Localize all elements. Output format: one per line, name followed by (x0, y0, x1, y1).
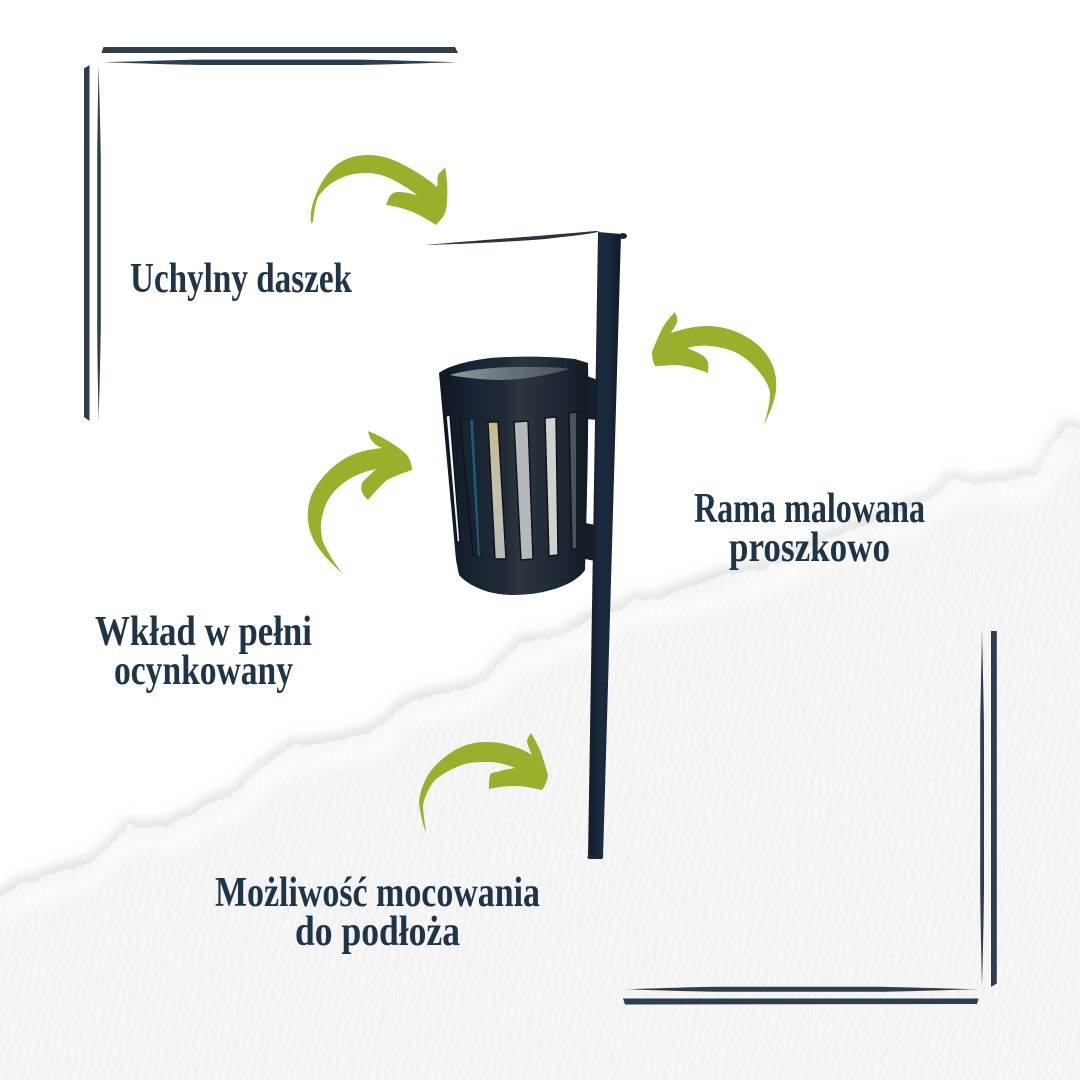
label: frame: Rama malowana (694, 486, 925, 532)
label: ground fixing: do podłoża (295, 909, 460, 955)
arrow: to roof (311, 155, 447, 225)
arrow: to ground fixing (419, 733, 548, 833)
label: frame: proszkowo (729, 525, 890, 571)
wall brackets (585, 376, 598, 561)
pole (588, 232, 627, 859)
label: ground fixing: Możliwość mocowania (215, 870, 540, 916)
bin slots (446, 412, 577, 560)
label: roof: Uchylny daszek (130, 256, 353, 302)
label: ground fixing (215, 870, 540, 955)
label: frame (694, 486, 925, 571)
bin body (439, 357, 588, 595)
icon: tilting roof (426, 231, 600, 245)
corner frame: top left (84, 47, 458, 421)
product: waste bin on a pole (426, 231, 627, 859)
label: insert: ocynkowany (114, 648, 293, 694)
arrow: to insert (308, 431, 412, 573)
label: insert: Wkład w pełni (95, 609, 312, 655)
label: insert (95, 609, 312, 694)
galvanized insert (450, 367, 570, 380)
torn paper panel (0, 423, 1080, 1080)
corner frame: bottom right (623, 630, 997, 1004)
arrow: to frame (652, 312, 776, 425)
